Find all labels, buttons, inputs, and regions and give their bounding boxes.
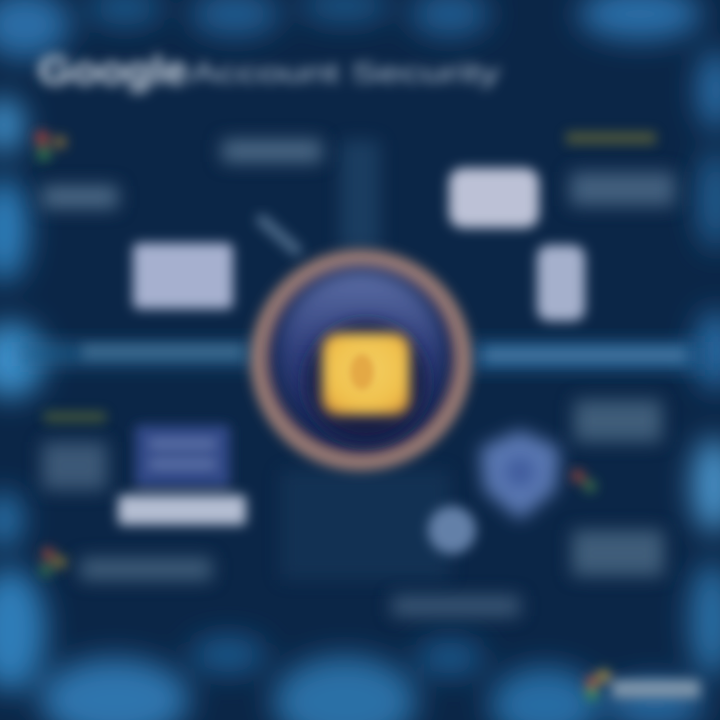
icon: shield <box>480 430 560 520</box>
icon: laptop <box>118 425 246 525</box>
text: bottom centre <box>392 596 520 616</box>
icon: Google logo bottom right <box>586 670 700 700</box>
icon: Google logo lower left <box>40 548 66 576</box>
text: left lower <box>42 442 107 490</box>
text: top centre <box>222 140 322 162</box>
card: top left panel <box>133 243 233 309</box>
central badge <box>258 257 464 463</box>
central vertical band <box>280 140 450 580</box>
text: right mid <box>574 400 662 442</box>
title: Google <box>38 49 188 93</box>
card: phone <box>537 245 585 321</box>
title: Account Security <box>190 57 500 88</box>
text: right upper <box>570 172 675 206</box>
title <box>38 49 500 93</box>
outer ring <box>258 257 464 463</box>
icon: gold lock <box>322 333 410 415</box>
card: top right panel <box>449 168 539 228</box>
central horizontal band <box>20 342 705 370</box>
text: right lower <box>572 530 664 576</box>
icon: Google logo lower right <box>572 470 596 492</box>
text blocks <box>42 140 675 616</box>
yellow accent labels <box>44 132 656 422</box>
band labels <box>82 345 685 363</box>
icon: Google logo top left <box>35 131 66 161</box>
text: left bottom <box>80 558 212 580</box>
inner disc <box>279 270 443 434</box>
icon: small circle <box>428 506 476 554</box>
icon: key top centre <box>262 220 296 250</box>
text: left upper <box>42 186 118 208</box>
